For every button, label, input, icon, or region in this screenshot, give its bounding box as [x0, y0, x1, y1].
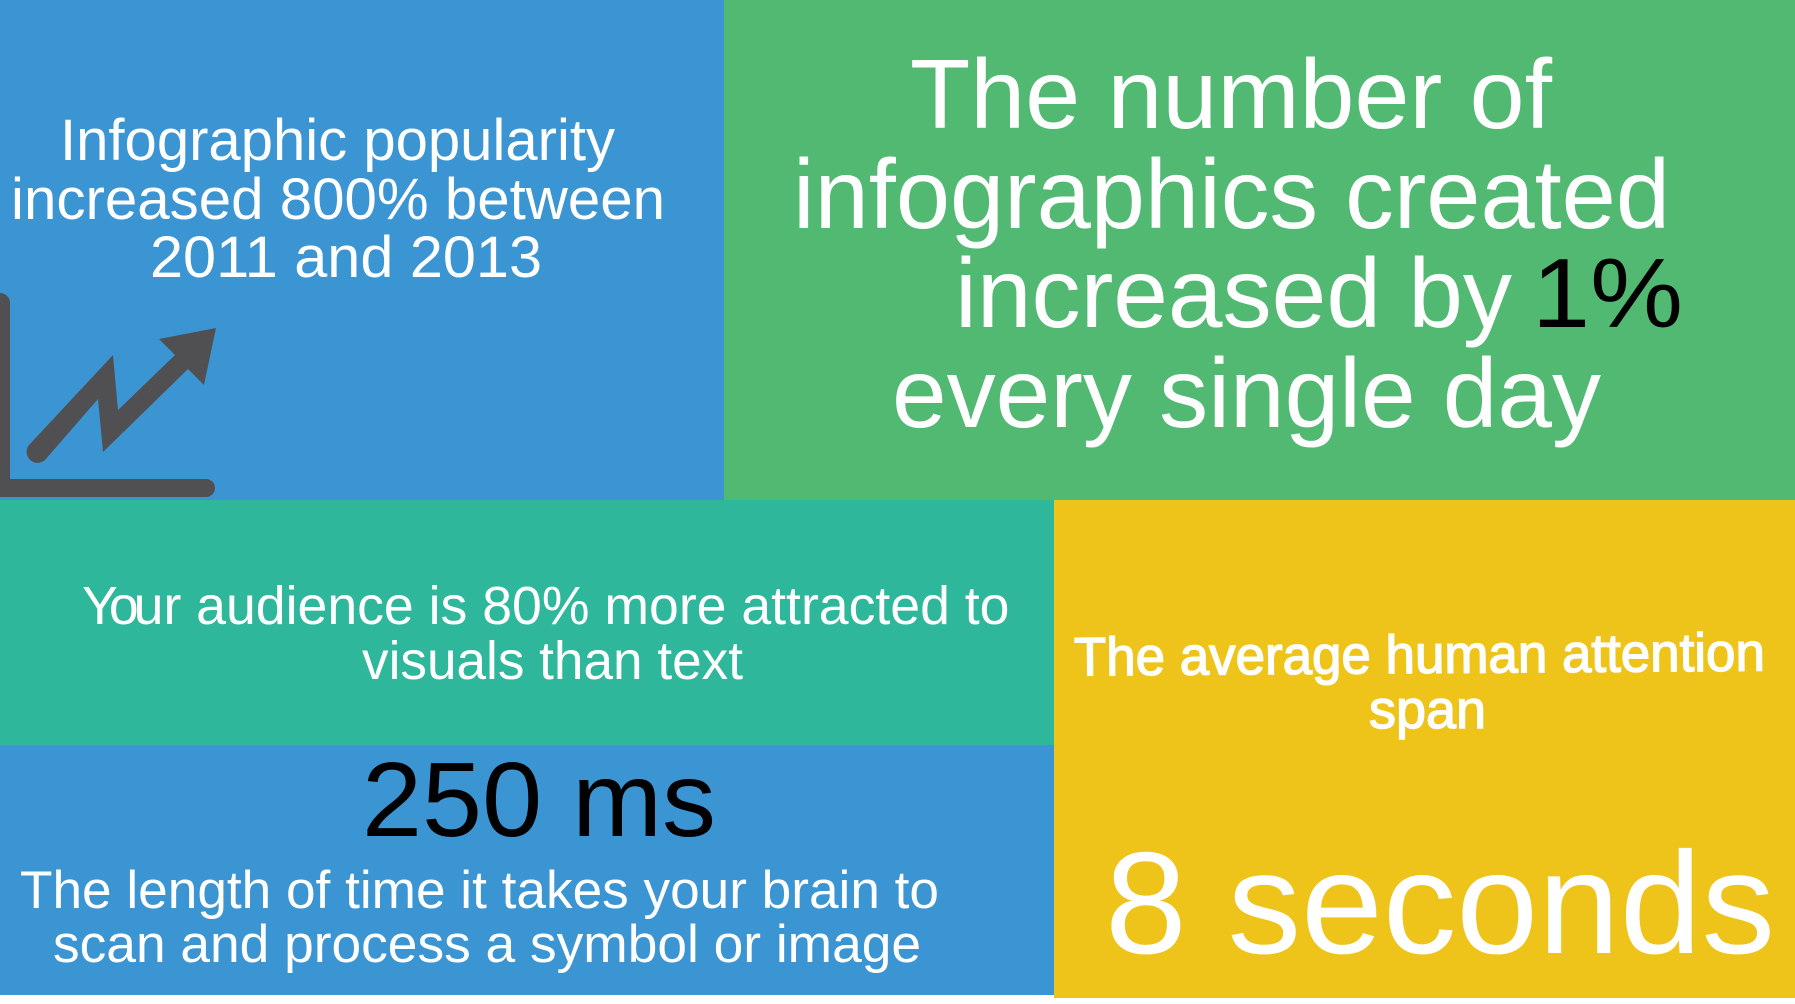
- text: scan time description: [20, 861, 939, 974]
- panel background: yellow: [1054, 500, 1795, 998]
- panel: audience attraction: [0, 500, 1054, 745]
- text: daily growth statistic: The number of: [910, 39, 1553, 149]
- text: attention span heading: span: [1369, 680, 1486, 740]
- text: attention span heading: The average human attention: [1074, 623, 1765, 687]
- text: visuals versus text statistic: [82, 576, 1010, 691]
- text: attention span heading: [1074, 623, 1765, 740]
- icon: rising chart arrow: [0, 293, 216, 497]
- text: daily growth statistic: increased by: [955, 238, 1512, 348]
- text: visuals versus text statistic: visuals than text: [362, 631, 743, 691]
- text: visuals versus text statistic: Your audience is 80% more attracted to: [82, 576, 1010, 636]
- panel background: blue: [0, 745, 1054, 995]
- text: daily growth statistic: [793, 39, 1683, 448]
- text: daily growth statistic: infographics created: [793, 139, 1670, 249]
- panel background: teal: [0, 500, 1054, 745]
- text: scan time description: The length of time it takes your brain to: [20, 861, 939, 920]
- panel background: green: [724, 0, 1795, 500]
- panel background: blue: [0, 0, 724, 500]
- text: popularity statistic: [11, 108, 665, 290]
- text: popularity statistic: Infographic popularity: [60, 108, 615, 173]
- big number: 8 seconds: 8 seconds: [1105, 822, 1775, 984]
- panel: number of infographics created: [724, 0, 1795, 500]
- text: popularity statistic: increased 800% between: [11, 167, 665, 232]
- panel: attention span: [1054, 500, 1795, 998]
- text: popularity statistic: 2011 and 2013: [150, 225, 542, 290]
- panel: brain scan time: [0, 741, 1054, 995]
- big number: 250 ms: 250 ms: [362, 741, 716, 859]
- text: daily growth statistic: every single day: [892, 338, 1601, 448]
- panel: infographic popularity: [0, 0, 724, 500]
- text: scan time description: scan and process a symbol or image: [53, 915, 921, 974]
- text: daily growth statistic: 1%: [1532, 238, 1683, 348]
